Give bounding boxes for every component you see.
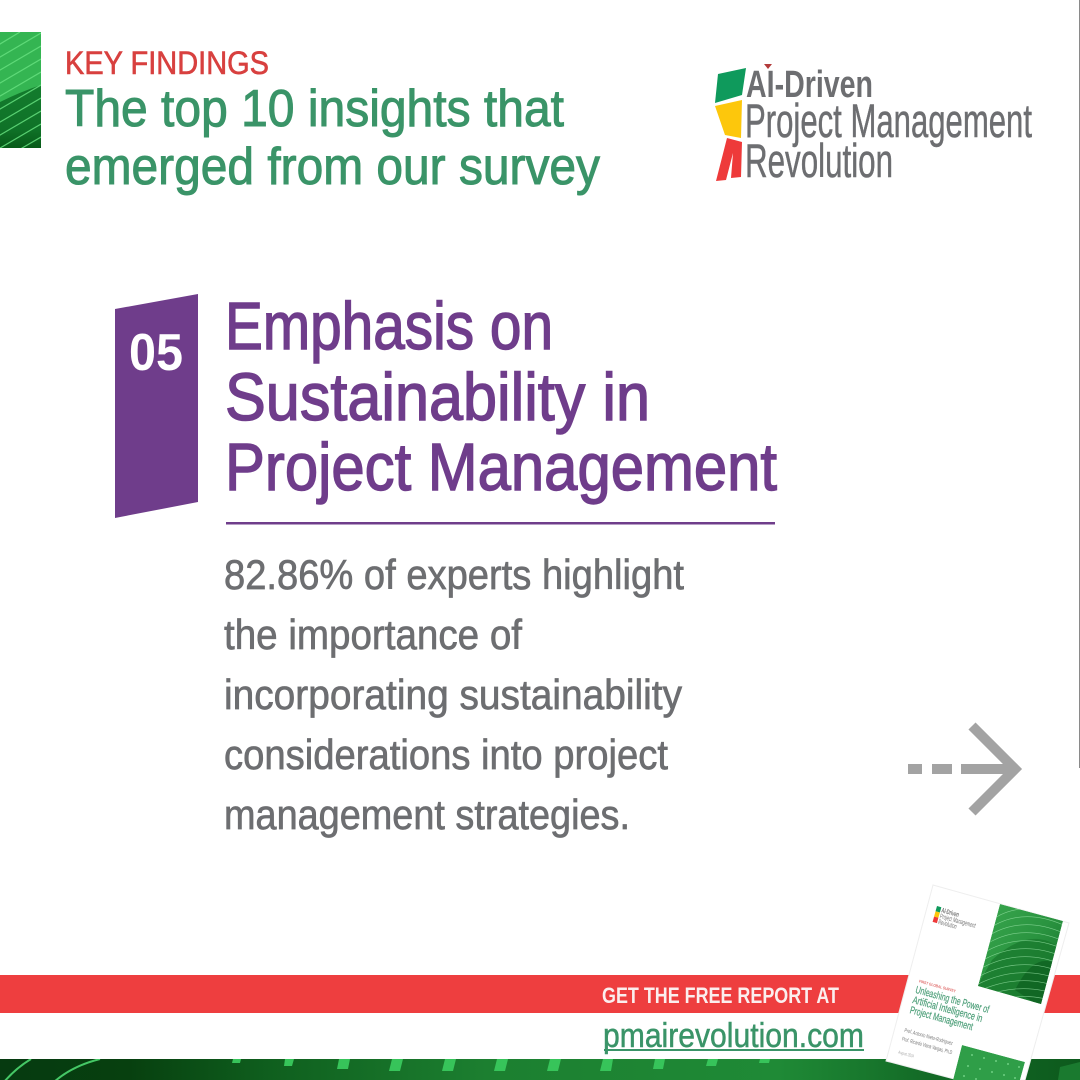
cover logo: AI-Driven (940, 907, 960, 919)
cover bottom image (953, 1045, 1025, 1080)
logo wordmark (745, 64, 1032, 187)
number badge (115, 294, 198, 518)
cover title: FIRST GLOBAL SURVEY (918, 979, 957, 994)
cover title: Prof. Antonio Nieto-Rodriguez (904, 1028, 953, 1047)
cover logo: Project Management (939, 913, 976, 930)
insight body text: considerations into project (224, 731, 668, 778)
insight body text: incorporating sustainability (224, 671, 682, 718)
insight body text: management strategies. (224, 791, 630, 838)
cover title (898, 978, 992, 1075)
cover title: August 2024 (898, 1050, 915, 1059)
red banner (0, 975, 1080, 1013)
insight heading: Sustainability in (225, 360, 650, 435)
insight body text: the importance of (224, 611, 522, 658)
title (65, 80, 600, 196)
cover logo (932, 906, 978, 936)
cover title: Unleashing the Power of (914, 984, 991, 1016)
section label: KEY FINDINGS (65, 45, 269, 81)
logo mark (715, 64, 772, 181)
right edge line (1079, 0, 1080, 768)
report cover (886, 885, 1070, 1080)
logo wordmark: Revolution (745, 134, 893, 187)
call to action: GET THE FREE REPORT AT (602, 983, 839, 1008)
cover title: Project Management (908, 1004, 974, 1033)
cover title: Prof. Ricardo Viana Vargas, Ph.D (901, 1037, 953, 1056)
cover image (978, 904, 1063, 1004)
logo wordmark: AI-Driven (746, 64, 873, 106)
number badge: 05 (129, 324, 183, 382)
logo (715, 64, 1032, 187)
insight body text (224, 551, 684, 838)
report link: pmairevolution.com (603, 1017, 864, 1055)
cover title: Artificial Intelligence in (911, 994, 984, 1025)
heading rule (226, 522, 775, 524)
cover logo: Revolution (937, 919, 957, 931)
decorative green tile (0, 32, 41, 158)
insight heading: Emphasis on (225, 289, 553, 364)
bottom green strip (0, 1059, 1080, 1080)
title: The top 10 insights that (65, 80, 564, 138)
insight heading: Project Management (225, 430, 777, 505)
arrow: next (908, 726, 1015, 812)
title: emerged from our survey (65, 138, 600, 196)
insight body text: 82.86% of experts highlight (224, 551, 684, 598)
insight heading (225, 289, 777, 505)
